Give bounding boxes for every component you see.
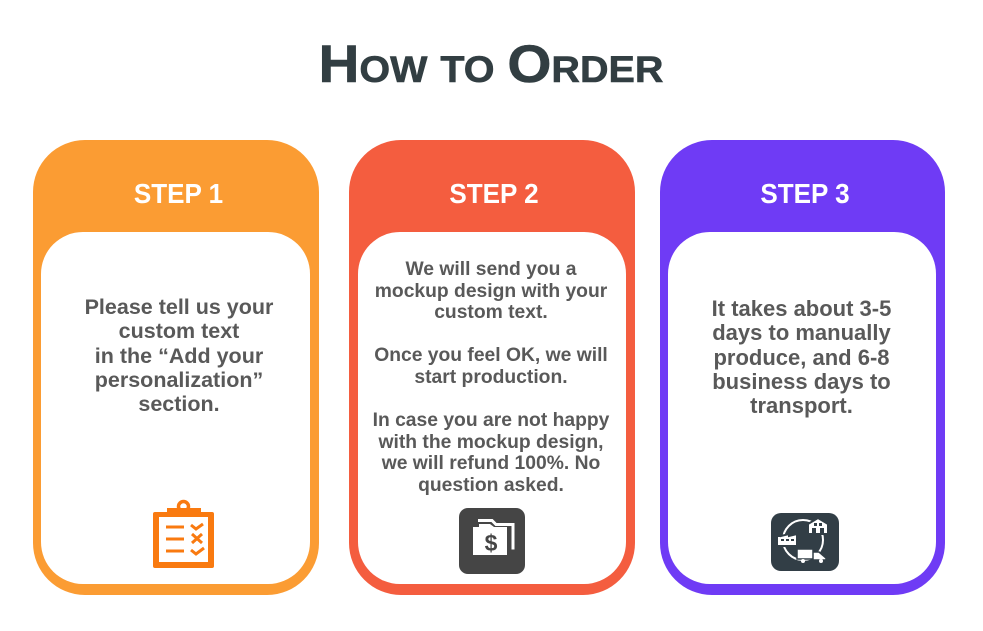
step 2 text: question asked. xyxy=(418,475,564,496)
step 1 text: Please tell us your xyxy=(85,295,273,319)
icon: clipboard checklist xyxy=(153,500,214,568)
step 1 text: custom text xyxy=(119,319,239,343)
step 3 text: business days to xyxy=(712,369,891,394)
step 3 text: transport. xyxy=(750,393,853,418)
icon: folder with dollar sign xyxy=(459,508,525,574)
step 2 text: mockup design with your xyxy=(375,281,607,302)
step 2 text: Once you feel OK, we will xyxy=(374,345,608,366)
step 3 heading: STEP 3 xyxy=(760,178,850,209)
step 1 text: section. xyxy=(138,392,220,416)
step 3 text: It takes about 3-5 xyxy=(712,296,891,321)
step 1 text: in the “Add your xyxy=(95,344,263,368)
step 1 text: personalization” xyxy=(95,368,263,392)
step 2 text xyxy=(373,259,610,496)
step 3 text xyxy=(712,296,891,418)
step 2 text: with the mockup design, xyxy=(379,432,603,453)
icon: factory warehouse truck cycle xyxy=(771,513,839,571)
icon: folder with dollar sign: $ xyxy=(485,530,498,556)
step 2 heading: STEP 2 xyxy=(449,178,539,209)
step 2 text: custom text. xyxy=(434,302,548,323)
step 3 text: days to manually xyxy=(712,320,891,345)
step 2 text: We will send you a xyxy=(405,259,577,280)
step 2 text: start production. xyxy=(414,367,568,388)
step 1 heading: STEP 1 xyxy=(134,178,223,209)
step 1 text xyxy=(85,295,274,416)
step 2 text: we will refund 100%. No xyxy=(382,453,600,474)
step 2 text: In case you are not happy xyxy=(373,410,609,431)
step 3 text: produce, and 6-8 xyxy=(713,345,890,370)
